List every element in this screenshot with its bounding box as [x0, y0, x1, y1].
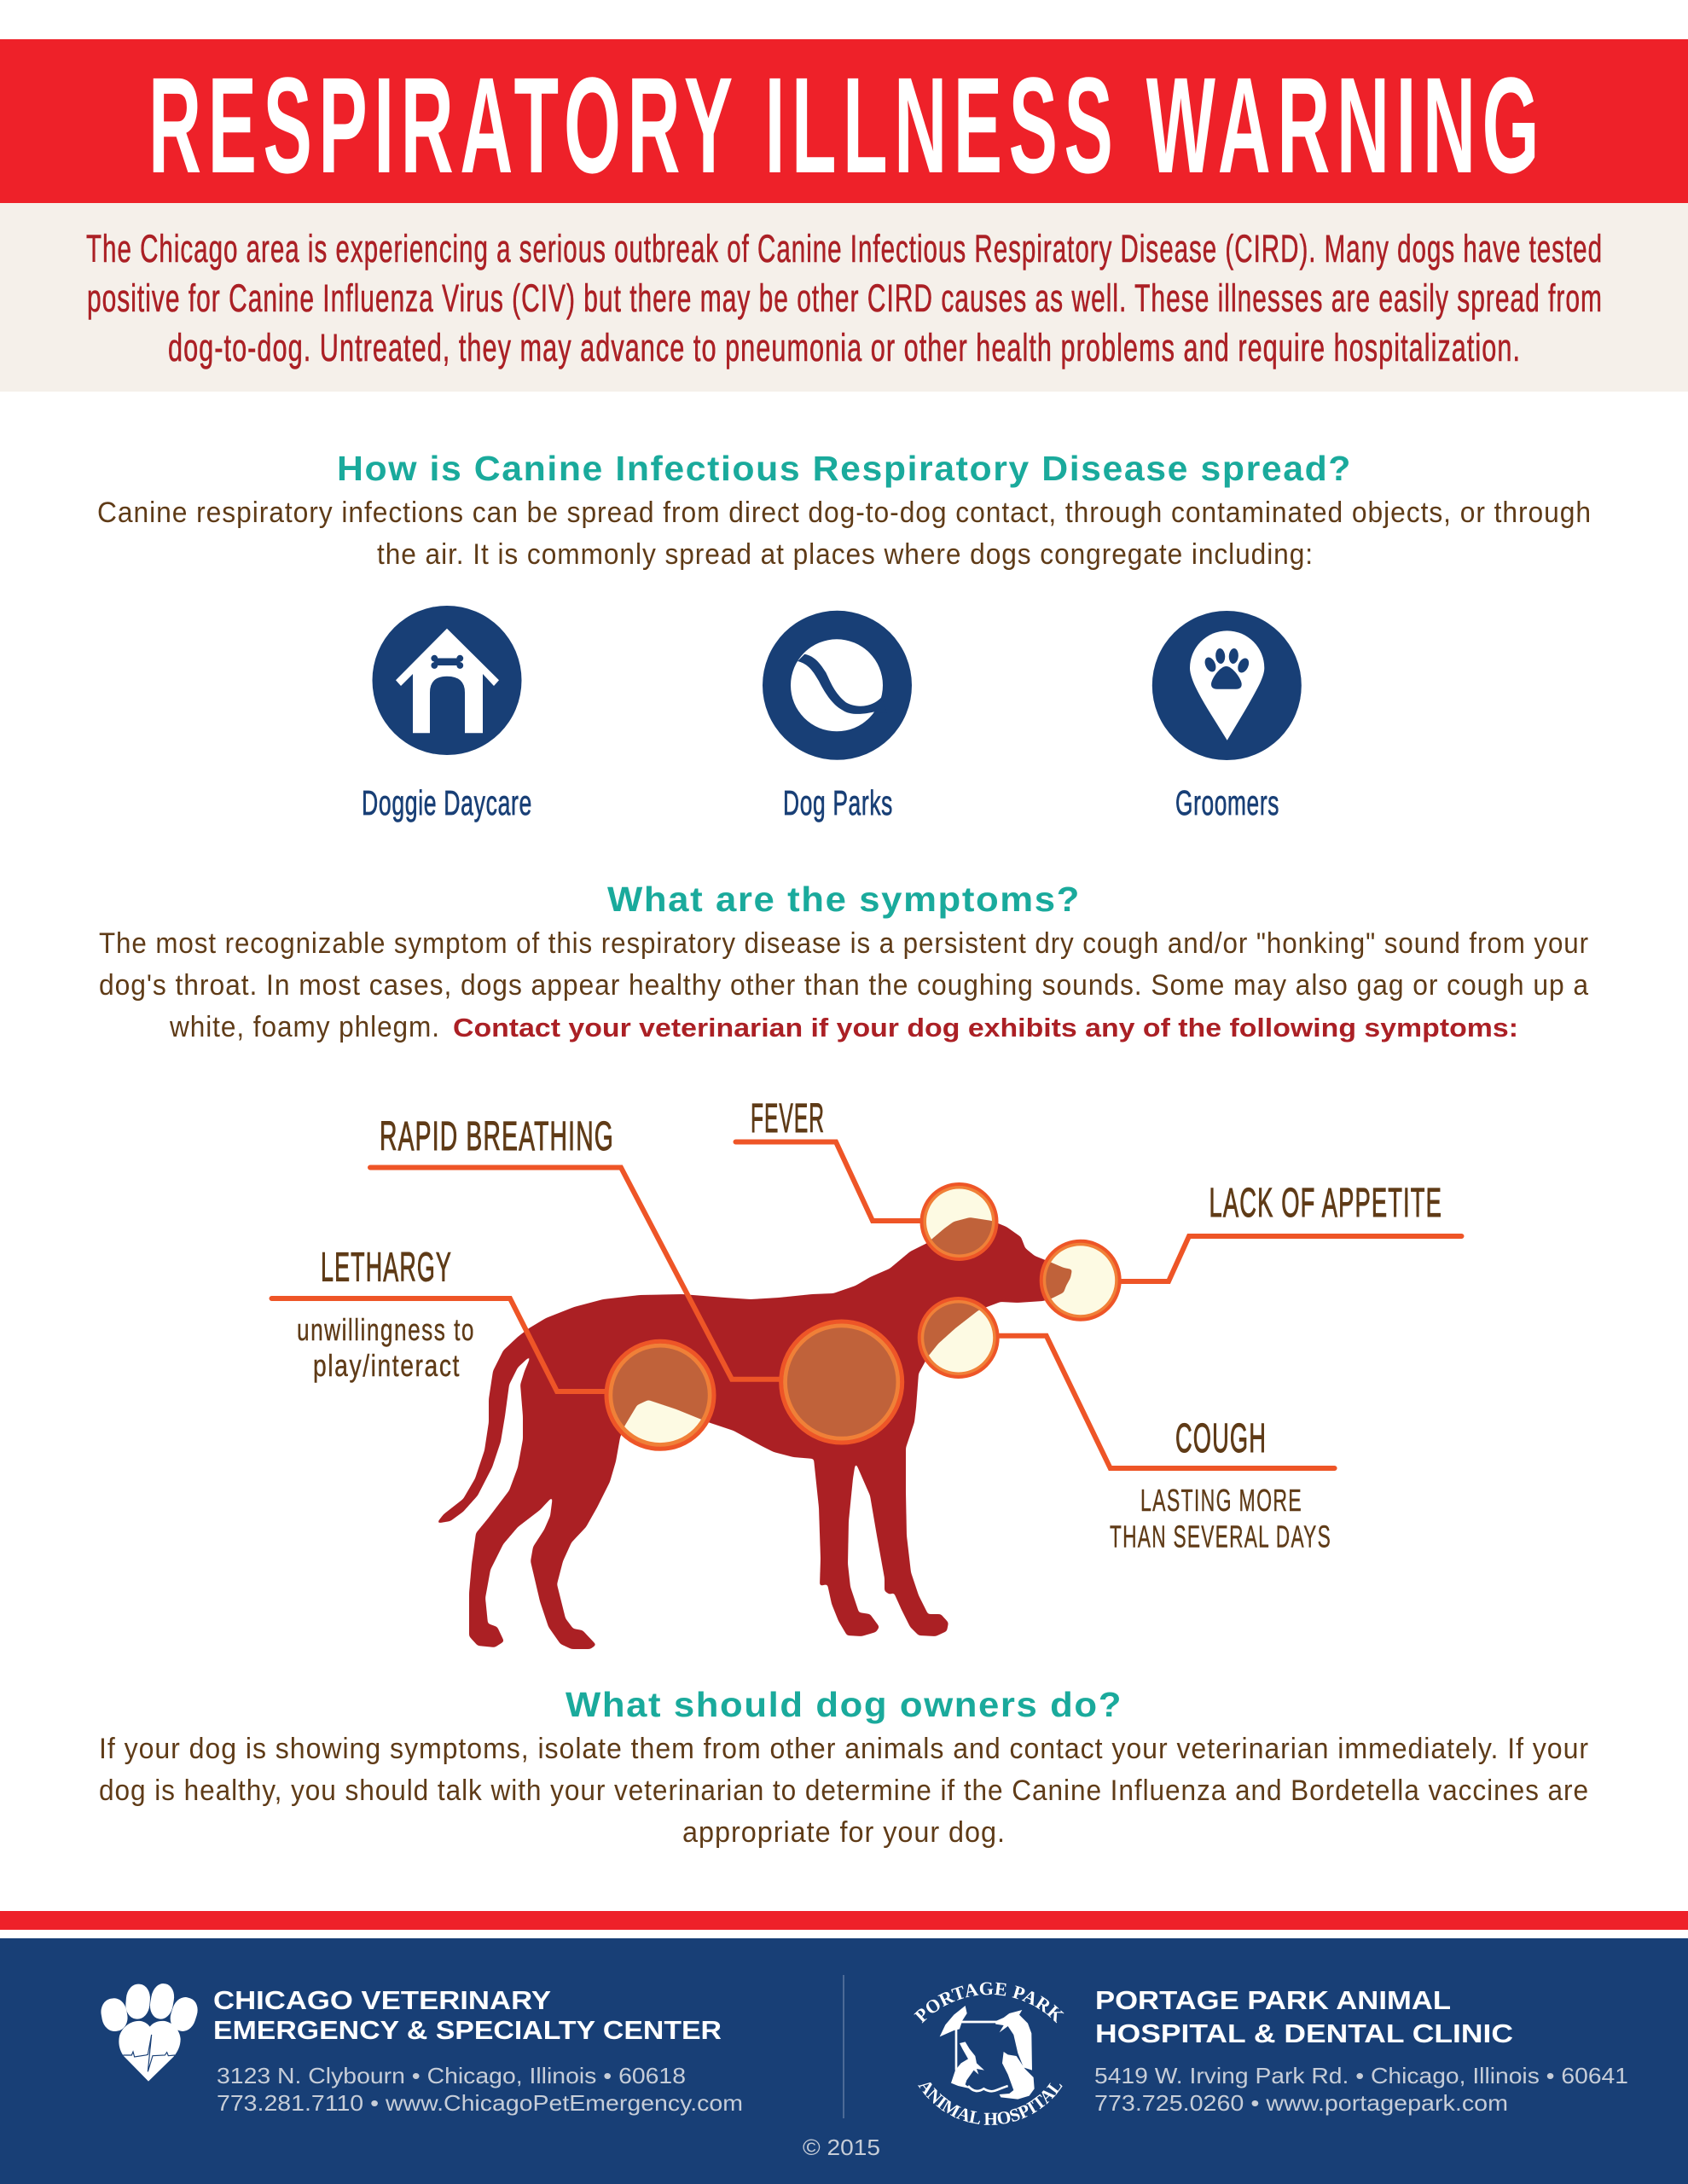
- leader line: rapid breathing: [370, 1167, 780, 1380]
- text: chicago veterinary contact: [217, 2063, 743, 2116]
- note: cough: [1110, 1483, 1331, 1554]
- label: rapid breathing: RAPID BREATHING: [380, 1114, 614, 1159]
- leader line: lack of appetite: [1122, 1236, 1462, 1281]
- note: cough: THAN SEVERAL DAYS: [1110, 1519, 1331, 1554]
- text block: owners: If your dog is showing symptoms, isolate them from other animals and contact your veterinarian immediately. If your: [99, 1733, 1589, 1765]
- leader line: lethargy: [271, 1298, 606, 1391]
- text: portage park name: [1095, 1985, 1513, 2048]
- text block: spread: the air. It is commonly spread at places where dogs congregate including:: [377, 538, 1314, 571]
- intro text: [86, 227, 1603, 369]
- text block: owners: appropriate for your dog.: [682, 1816, 1006, 1849]
- panel: footer: [0, 1938, 1688, 2184]
- label: lethargy: LETHARGY: [321, 1246, 452, 1290]
- leader line: cough: [1000, 1336, 1335, 1468]
- text: chicago veterinary name: [213, 1985, 722, 2045]
- text: portage park contact: 773.725.0260 • www.portagepark.com: [1094, 2090, 1508, 2116]
- marker: lethargy: [604, 1339, 716, 1451]
- text: chicago veterinary name: CHICAGO VETERINARY: [213, 1985, 551, 2015]
- dog silhouette: [437, 1217, 1072, 1649]
- icon: doggie daycare: [372, 606, 522, 755]
- diagram: dog symptoms: [271, 1096, 1462, 1649]
- label: doggie daycare: Doggie Daycare: [362, 783, 532, 822]
- heading: how is it spread: How is Canine Infectious Respiratory Disease spread?: [337, 449, 1352, 488]
- logo: portage park: PORTAGE PARK: [914, 1983, 1064, 2024]
- text block: symptoms: white, foamy phlegm.: [169, 1011, 440, 1043]
- callout: contact your veterinarian: Contact your veterinarian if your dog exhibits any of the following symptoms:: [453, 1013, 1518, 1043]
- marker: fever: [919, 1182, 998, 1261]
- icon: dog parks ball: [763, 611, 912, 760]
- text: chicago veterinary name: EMERGENCY & SPECIALTY CENTER: [213, 2015, 722, 2045]
- label: cough: COUGH: [1175, 1416, 1267, 1461]
- copyright: © 2015: [803, 2135, 880, 2160]
- text: chicago veterinary contact: 3123 N. Clybourn • Chicago, Illinois • 60618: [217, 2063, 686, 2088]
- text: portage park contact: 5419 W. Irving Park Rd. • Chicago, Illinois • 60641: [1094, 2063, 1628, 2088]
- note: lethargy: [297, 1312, 475, 1383]
- marker: rapid breathing: [779, 1319, 904, 1445]
- note: lethargy: play/interact: [313, 1348, 461, 1383]
- note: lethargy: unwillingness to: [297, 1312, 475, 1347]
- text block: symptoms: dog's throat. In most cases, dogs appear healthy other than the coughing sounds. Some may also gag or cough up a: [99, 969, 1589, 1002]
- leader line: fever: [735, 1141, 923, 1221]
- marker: cough: [918, 1297, 1000, 1379]
- text: chicago veterinary contact: 773.281.7110 • www.ChicagoPetEmergency.com: [217, 2090, 743, 2116]
- text block: owners: [99, 1733, 1589, 1849]
- icon: groomers pin: [1152, 611, 1302, 760]
- text block: spread: Canine respiratory infections can be spread from direct dog-to-dog contact, through contaminated objects, or through: [97, 497, 1592, 529]
- text block: owners: dog is healthy, you should talk with your veterinarian to determine if the Canine Influenza and Bordetella vaccines are: [99, 1774, 1589, 1807]
- logo: portage park: [914, 1983, 1064, 2125]
- logo: paw heart: [99, 1982, 201, 2082]
- label: fever: FEVER: [751, 1096, 825, 1141]
- text block: spread: [97, 497, 1592, 571]
- red stripe: [0, 1911, 1688, 1930]
- text block: symptoms: [99, 927, 1589, 1043]
- panel: title banner: [0, 39, 1688, 203]
- label: groomers: Groomers: [1175, 783, 1279, 822]
- label: dog parks: Dog Parks: [783, 783, 893, 822]
- heading: symptoms: What are the symptoms?: [607, 880, 1081, 919]
- text: portage park name: PORTAGE PARK ANIMAL: [1095, 1985, 1451, 2015]
- note: cough: LASTING MORE: [1140, 1483, 1302, 1518]
- label: lack of appetite: LACK OF APPETITE: [1209, 1181, 1442, 1226]
- text: portage park name: HOSPITAL & DENTAL CLINIC: [1095, 2018, 1513, 2048]
- logo: portage park: ANIMAL HOSPITAL: [918, 2082, 1063, 2125]
- text: portage park contact: [1094, 2063, 1628, 2116]
- heading: what should owners do: What should dog owners do?: [566, 1685, 1122, 1724]
- marker: lack of appetite: [1039, 1239, 1122, 1321]
- text block: symptoms: The most recognizable symptom of this respiratory disease is a persistent dry cough and/or "honking" sound from your: [99, 927, 1589, 960]
- panel: intro: [0, 203, 1688, 392]
